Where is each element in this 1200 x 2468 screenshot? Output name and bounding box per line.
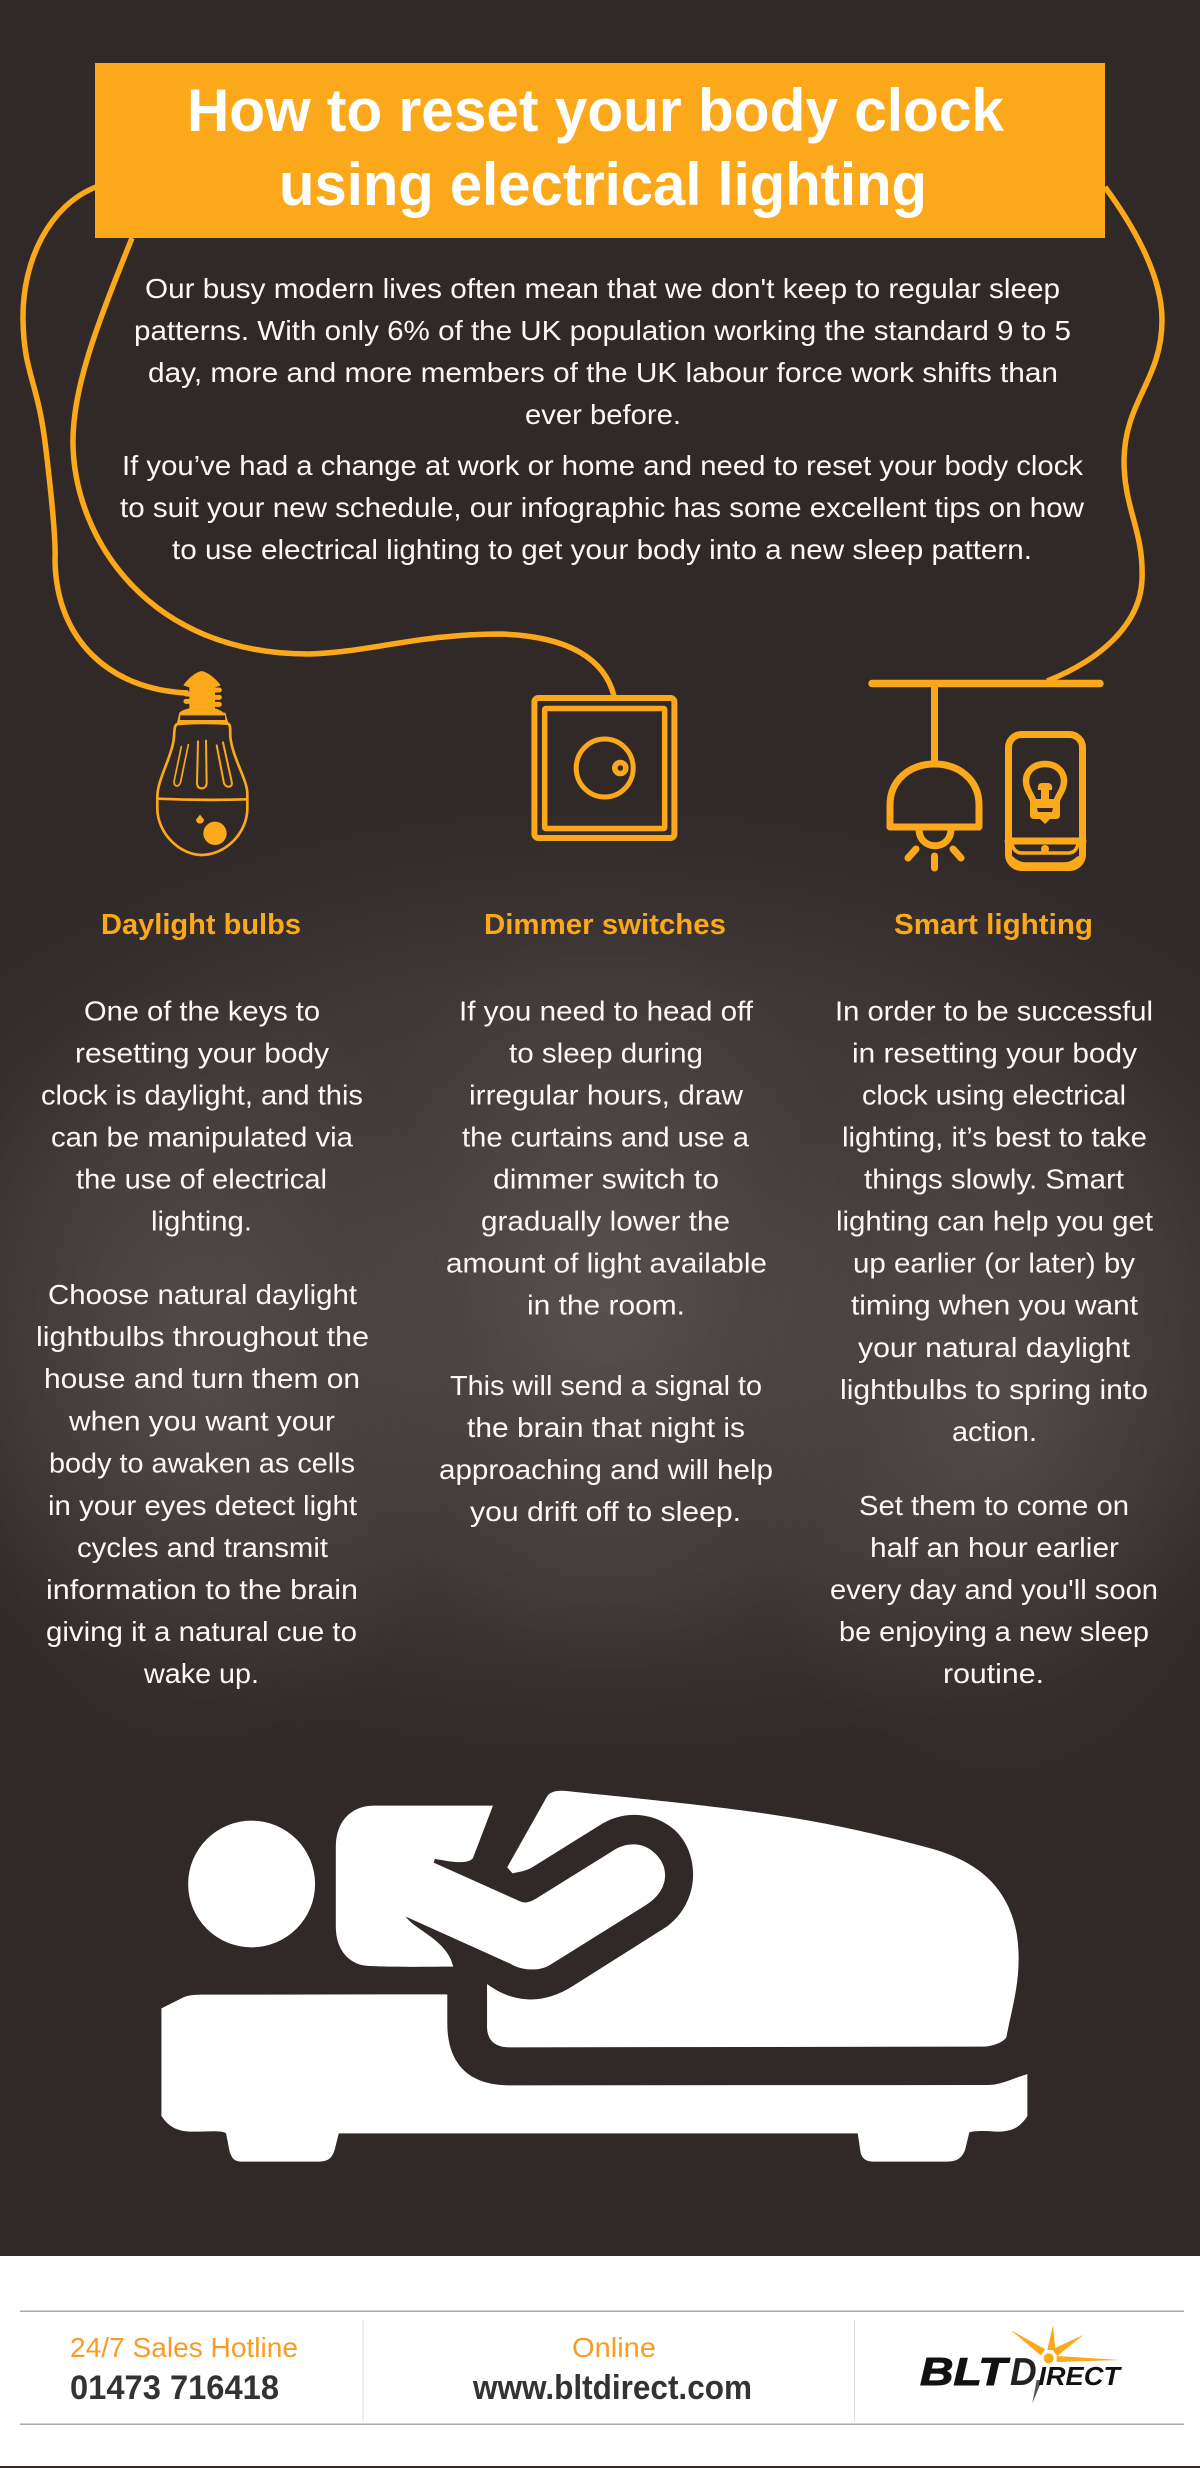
title banner [95, 63, 1105, 238]
text: daylight bulbs: cycles and transmit [77, 1532, 328, 1563]
icon: person sleeping in bed [161, 1791, 1027, 2162]
text: smart lighting: lightbulbs to spring into [840, 1374, 1148, 1405]
text: sales hotline [70, 2332, 298, 2407]
text: smart lighting: in resetting your body [852, 1038, 1137, 1068]
intro text: If you’ve had a change at work or home and need to reset your body clock [122, 450, 1084, 481]
text: daylight bulbs: Choose natural daylight [48, 1279, 357, 1310]
text: dimmer switches: dimmer switch to [493, 1164, 719, 1194]
text: daylight bulbs: giving it a natural cue to [46, 1616, 357, 1647]
text: dimmer switches: you drift off to sleep. [470, 1496, 741, 1527]
text: sales hotline: 01473 716418 [70, 2369, 279, 2407]
text: smart lighting: half an hour earlier [870, 1532, 1119, 1563]
text: dimmer switches: to sleep during [509, 1038, 703, 1068]
text: smart lighting: clock using electrical [862, 1080, 1126, 1110]
cable: to smart lighting [1047, 187, 1162, 681]
text: smart lighting: up earlier (or later) by [853, 1248, 1135, 1278]
text: daylight bulbs: the use of electrical [76, 1164, 327, 1194]
text: dimmer switches: approaching and will help [439, 1454, 773, 1485]
text: online: Online [572, 2332, 656, 2363]
logo: BLT Direct [920, 2325, 1122, 2403]
intro text: Our busy modern lives often mean that we don't keep to regular sleep [145, 273, 1060, 304]
text: smart lighting [830, 996, 1158, 1689]
text: daylight bulbs: can be manipulated via [51, 1122, 353, 1152]
text: online [472, 2332, 752, 2407]
text: daylight bulbs: clock is daylight, and this [41, 1080, 363, 1110]
text: smart lighting: timing when you want [851, 1290, 1138, 1320]
title banner: How to reset your body clock [187, 77, 1005, 144]
text: smart lighting: action. [952, 1416, 1037, 1447]
cable: to dimmer switch [73, 238, 614, 696]
icon: daylight bulb [157, 671, 247, 855]
icon: smart lighting pendant lamp and phone [872, 684, 1100, 868]
text: daylight bulbs: information to the brain [46, 1574, 358, 1605]
text: smart lighting: In order to be successful [835, 996, 1153, 1026]
text: daylight bulbs: resetting your body [75, 1038, 329, 1068]
intro text: day, more and more members of the UK labour force work shifts than [148, 357, 1058, 388]
text: dimmer switches: the curtains and use a [462, 1122, 749, 1152]
intro text: to use electrical lighting to get your body into a new sleep pattern. [172, 534, 1032, 565]
heading: dimmer switches: Dimmer switches [484, 909, 726, 941]
text: dimmer switches [439, 996, 773, 1527]
text: daylight bulbs: lightbulbs throughout the [36, 1321, 369, 1352]
intro text: patterns. With only 6% of the UK population working the standard 9 to 5 [134, 315, 1071, 346]
text: smart lighting: routine. [943, 1658, 1044, 1689]
text: daylight bulbs: lighting. [151, 1206, 252, 1236]
icon: dimmer switch [534, 698, 674, 838]
intro text [120, 273, 1085, 565]
text: smart lighting: every day and you'll soon [830, 1574, 1158, 1605]
text: dimmer switches: amount of light available [446, 1248, 767, 1278]
logo: BLT Direct: D [1010, 2350, 1037, 2394]
text: dimmer switches: irregular hours, draw [469, 1080, 744, 1110]
text: smart lighting: lighting can help you get [836, 1206, 1153, 1236]
text: daylight bulbs: in your eyes detect light [48, 1490, 357, 1521]
intro text: ever before. [525, 399, 681, 430]
logo: BLT Direct: BLT [920, 2350, 1010, 2394]
text: daylight bulbs: body to awaken as cells [49, 1448, 355, 1478]
text: sales hotline: 24/7 Sales Hotline [70, 2332, 298, 2363]
text: smart lighting: be enjoying a new sleep [839, 1616, 1149, 1647]
text: smart lighting: lighting, it’s best to take [842, 1122, 1147, 1152]
text: dimmer switches: the brain that night is [467, 1412, 745, 1443]
logo: BLT Direct: IRECT [1038, 2363, 1122, 2391]
text: daylight bulbs: when you want your [68, 1406, 335, 1436]
text: dimmer switches: in the room. [527, 1290, 685, 1320]
title banner: using electrical lighting [279, 151, 927, 218]
text: daylight bulbs: One of the keys to [84, 996, 320, 1026]
text: daylight bulbs: wake up. [143, 1658, 259, 1689]
text: online: www.bltdirect.com [472, 2369, 752, 2407]
footer [0, 2256, 1200, 2466]
text: smart lighting: Set them to come on [859, 1490, 1129, 1521]
text: smart lighting: your natural daylight [858, 1332, 1130, 1363]
text: dimmer switches: If you need to head off [459, 996, 753, 1026]
text: dimmer switches: gradually lower the [481, 1206, 730, 1236]
cable: to daylight bulb [23, 187, 188, 693]
heading: daylight bulbs: Daylight bulbs [101, 909, 301, 941]
text: daylight bulbs [36, 996, 369, 1689]
intro text: to suit your new schedule, our infographic has some excellent tips on how [120, 492, 1085, 523]
heading: smart lighting: Smart lighting [894, 909, 1093, 941]
text: daylight bulbs: house and turn them on [44, 1363, 360, 1394]
text: dimmer switches: This will send a signal to [450, 1370, 762, 1401]
text: smart lighting: things slowly. Smart [864, 1164, 1124, 1194]
